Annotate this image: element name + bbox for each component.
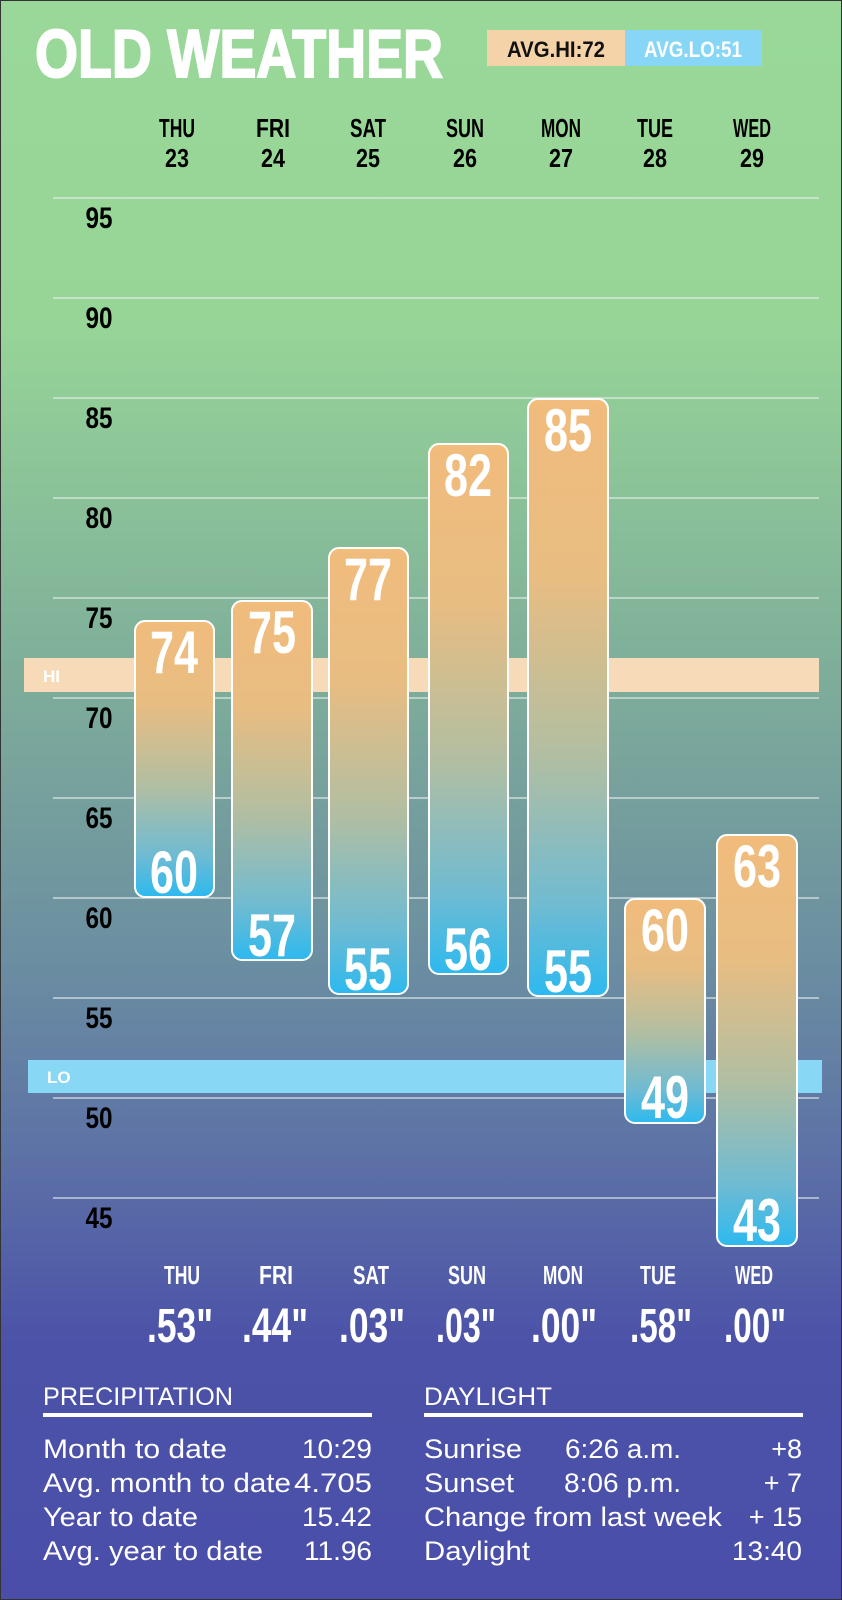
- bar values: 55: [544, 938, 592, 1005]
- bar values: 74: [150, 619, 198, 686]
- panel: precipitation: 11.96: [304, 1536, 372, 1566]
- bar values: [150, 397, 781, 1254]
- y axis labels: 55: [86, 1002, 112, 1035]
- panel: precipitation: Year to date: [43, 1502, 198, 1532]
- day headers top: 24: [261, 143, 285, 173]
- bar values: 75: [248, 599, 296, 666]
- panel: daylight: 6:26 a.m.: [565, 1434, 681, 1464]
- bars: [135, 399, 797, 1246]
- panel: precipitation: PRECIPITATION: [43, 1383, 233, 1411]
- bar values: 49: [641, 1064, 689, 1131]
- panel: daylight: [424, 1383, 803, 1566]
- panel: precipitation: [43, 1383, 372, 1566]
- y axis labels: 80: [86, 502, 112, 535]
- day headers top: 23: [165, 143, 189, 173]
- bar values: 43: [733, 1187, 781, 1254]
- panel: daylight: 8:06 p.m.: [564, 1468, 681, 1498]
- panel: precipitation: Month to date: [43, 1434, 227, 1464]
- title: OLD WEATHER: [35, 16, 443, 92]
- bar values: 60: [641, 897, 689, 964]
- bottom day labels: SUN: [448, 1260, 486, 1290]
- panel: daylight: +8: [771, 1434, 802, 1464]
- bottom day labels: [164, 1260, 773, 1290]
- y axis labels: 50: [86, 1102, 112, 1135]
- bar values: 55: [344, 936, 392, 1003]
- day headers top: MON: [541, 113, 581, 143]
- panel: precipitation: Avg. year to date: [43, 1536, 263, 1566]
- HI average band: HI: [43, 667, 60, 686]
- y axis labels: 45: [86, 1202, 112, 1235]
- bar values: 60: [150, 839, 198, 906]
- y axis labels: 95: [86, 202, 112, 235]
- bottom day labels: WED: [735, 1260, 773, 1290]
- day headers top: SUN: [446, 113, 484, 143]
- y axis labels: 75: [86, 602, 112, 635]
- precipitation per day: [147, 1300, 786, 1353]
- precipitation per day: .03": [339, 1300, 405, 1353]
- precipitation per day: .00": [531, 1300, 597, 1353]
- precipitation per day: .53": [147, 1300, 213, 1353]
- y axis labels: 60: [86, 902, 112, 935]
- day headers top: 25: [356, 143, 380, 173]
- day headers top: 27: [549, 143, 573, 173]
- day headers top: WED: [733, 113, 771, 143]
- precipitation per day: .03": [436, 1300, 496, 1353]
- panel: daylight: Change from last week: [424, 1502, 723, 1532]
- panel: precipitation: 15.42: [302, 1502, 372, 1532]
- panel: precipitation: 10:29: [302, 1434, 372, 1464]
- panel: daylight: Sunrise: [424, 1434, 522, 1464]
- bottom day labels: SAT: [353, 1260, 389, 1290]
- panel: precipitation: 4.705: [294, 1468, 372, 1498]
- day headers top: SAT: [350, 113, 386, 143]
- day headers top: 26: [453, 143, 477, 173]
- day headers top: 28: [643, 143, 667, 173]
- legend badges: [487, 30, 762, 66]
- LO average band: LO: [47, 1068, 71, 1087]
- precipitation per day: .58": [630, 1300, 692, 1353]
- y axis labels: [86, 202, 112, 1235]
- y axis labels: 65: [86, 802, 112, 835]
- day headers top: TUE: [637, 113, 673, 143]
- HI average band: [24, 658, 819, 692]
- LO average band: [28, 1060, 822, 1093]
- day headers top: 29: [740, 143, 764, 173]
- legend badges: AVG.LO:51: [644, 37, 742, 62]
- bar values: 57: [248, 902, 296, 969]
- bottom day labels: FRI: [259, 1260, 293, 1290]
- bar values: 77: [344, 546, 392, 613]
- bottom day labels: TUE: [640, 1260, 676, 1290]
- bottom day labels: THU: [164, 1260, 200, 1290]
- y axis labels: 85: [86, 402, 112, 435]
- bar values: 56: [444, 916, 492, 983]
- bar values: 85: [544, 397, 592, 464]
- day headers top: [159, 113, 771, 173]
- bar values: 82: [444, 442, 492, 509]
- panel: daylight: DAYLIGHT: [424, 1383, 552, 1411]
- y axis labels: 90: [86, 302, 112, 335]
- day headers top: FRI: [256, 113, 290, 143]
- panel: precipitation: Avg. month to date: [43, 1468, 291, 1498]
- panel: daylight: 13:40: [732, 1536, 802, 1566]
- panel: daylight: + 15: [749, 1502, 802, 1532]
- precipitation per day: .44": [242, 1300, 308, 1353]
- panel: daylight: + 7: [764, 1468, 802, 1498]
- day headers top: THU: [159, 113, 195, 143]
- bottom day labels: MON: [543, 1260, 583, 1290]
- legend badges: AVG.HI:72: [507, 37, 605, 62]
- precipitation per day: .00": [724, 1300, 786, 1353]
- panel: daylight: Sunset: [424, 1468, 515, 1498]
- bar values: 63: [733, 833, 781, 900]
- y axis labels: 70: [86, 702, 112, 735]
- panel: daylight: Daylight: [424, 1536, 531, 1566]
